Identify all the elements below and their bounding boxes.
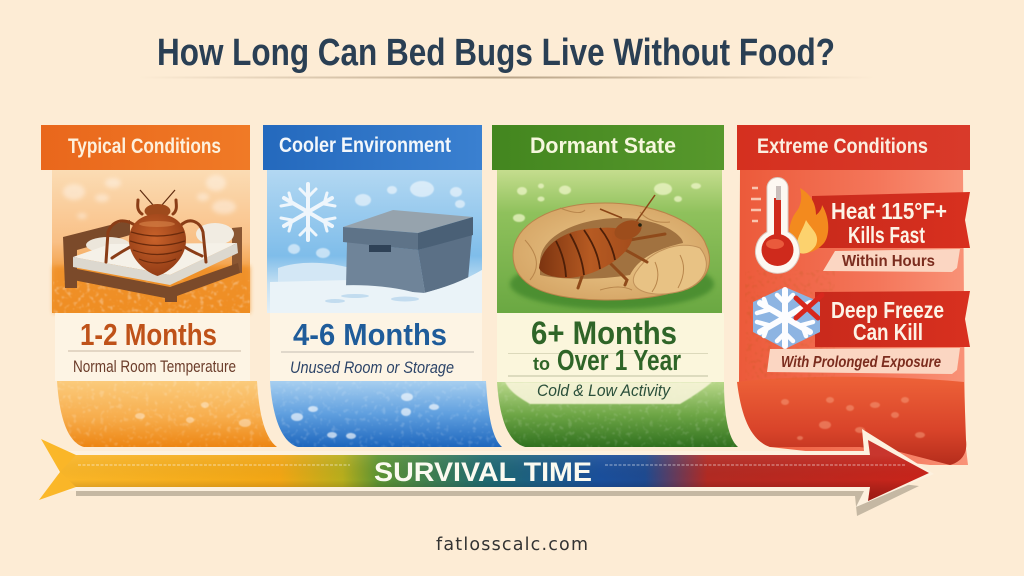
- snow shadows: [325, 294, 419, 303]
- floor colour: [53, 266, 250, 313]
- panel: extreme conditions: [737, 125, 970, 465]
- duration: 4-6 Months: [293, 317, 447, 352]
- icon: thermometer: [751, 178, 800, 273]
- decorative spots: [513, 183, 701, 222]
- duration second line: to: [533, 354, 550, 374]
- lower band: [57, 381, 277, 447]
- icon: bed: [63, 220, 242, 302]
- website credit: fatlosscalc.com: [436, 535, 588, 555]
- freeze note: With Prolonged Exposure: [781, 354, 941, 371]
- heat headline: Heat 115°F+: [831, 198, 947, 224]
- dark grass under cocoon: [510, 259, 714, 309]
- panel image background: [52, 170, 250, 313]
- heat note: Within Hours: [842, 253, 935, 270]
- header: [41, 125, 250, 170]
- snow drift: [270, 270, 482, 313]
- dashed highlight: [78, 464, 905, 466]
- cream duration band: [497, 313, 724, 382]
- white duration band: [55, 313, 250, 381]
- arrow shading: [60, 440, 929, 501]
- heat note band: [823, 249, 960, 272]
- mid speckle: [745, 270, 835, 380]
- divider: [281, 352, 474, 353]
- lower band: [737, 377, 966, 465]
- divider lower: [508, 376, 708, 377]
- panel image background: [497, 170, 722, 313]
- header label: Cooler Environment: [279, 134, 451, 157]
- distant snow hill: [278, 263, 350, 284]
- condition note: Normal Room Temperature: [73, 358, 236, 376]
- condition note: Cold & Low Activity: [537, 381, 671, 400]
- note backdrop: [505, 382, 712, 404]
- icon: storage box: [343, 210, 473, 293]
- header: [263, 125, 482, 170]
- duration: 1-2 Months: [80, 317, 217, 352]
- divider: [68, 350, 241, 352]
- freeze headline: Deep Freeze: [831, 297, 944, 323]
- arrow label: SURVIVAL TIME: [374, 457, 592, 487]
- header label: Dormant State: [530, 133, 676, 158]
- duration: 6+ Months: [531, 315, 677, 351]
- arrow outline: [58, 429, 934, 507]
- freeze ribbon: [815, 291, 970, 347]
- white duration band: [270, 313, 482, 381]
- panel background: [739, 170, 968, 465]
- icon: dormant bed bug: [539, 195, 665, 288]
- panel: cooler environment: [263, 125, 502, 447]
- freeze headline line two: Can Kill: [853, 319, 923, 345]
- header: [492, 125, 724, 170]
- heat ribbon: [812, 192, 970, 248]
- icon: cocoon: [513, 203, 710, 300]
- icon: snowflake: [281, 184, 335, 240]
- header label: Typical Conditions: [68, 135, 221, 158]
- decorative clouds: [288, 181, 465, 258]
- decorative clouds: [63, 175, 236, 219]
- icon: flame: [789, 188, 828, 254]
- panel: dormant state: [492, 125, 738, 447]
- condition note: Unused Room or Storage: [290, 359, 454, 377]
- snow in front of box: [270, 270, 482, 313]
- lower band: [497, 382, 738, 447]
- icon: red cross: [796, 295, 822, 318]
- duration second line: Over 1 Year: [557, 345, 681, 377]
- arrow body: [39, 439, 929, 501]
- panel image background: [267, 170, 482, 313]
- heat headline line two: Kills Fast: [848, 222, 925, 248]
- duration second line: [533, 345, 681, 377]
- arrow shadow: [76, 478, 919, 516]
- icon: frozen snowflake: [753, 287, 820, 349]
- speckle texture: [53, 280, 250, 313]
- arrow: survival time: [39, 429, 934, 516]
- divider upper: [508, 353, 708, 354]
- header: [737, 125, 970, 170]
- title: How Long Can Bed Bugs Live Without Food?: [157, 32, 835, 74]
- freeze note band: [767, 348, 960, 374]
- header label: Extreme Conditions: [757, 135, 928, 158]
- panel: typical conditions: [41, 125, 277, 447]
- lower band: [270, 381, 502, 447]
- icon: bed bug: [106, 190, 206, 276]
